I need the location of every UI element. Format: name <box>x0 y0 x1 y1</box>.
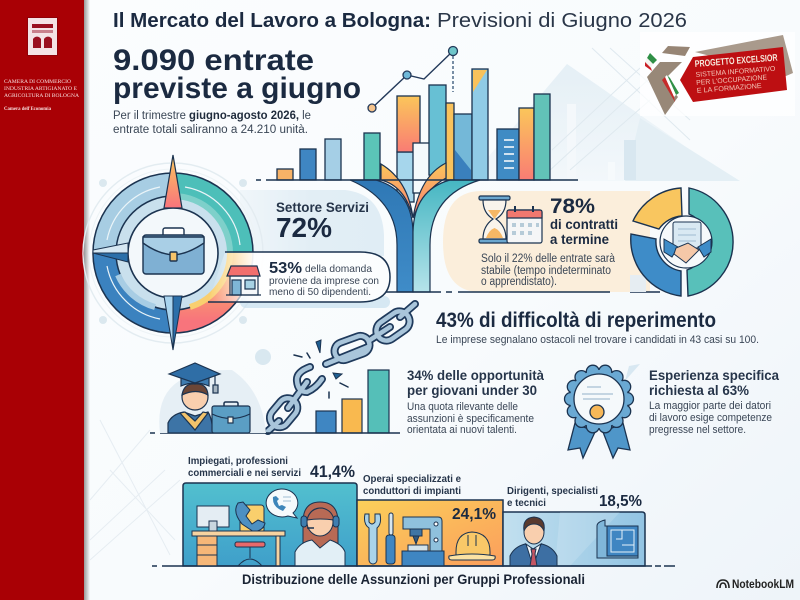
left panel: settore servizi background <box>240 190 384 256</box>
callout: 53% small businesses pill: proviene da imprese con <box>269 275 379 287</box>
text: 34% giovani under 30: Una quota rilevante delle <box>407 401 518 413</box>
chart: small rising bars <box>150 370 400 433</box>
label: operai: conduttori di impianti <box>363 485 461 497</box>
label: impiegati: commerciali e nei servizi <box>188 467 301 479</box>
callout: 53% small businesses pill: della domanda <box>305 263 372 275</box>
headline: 9.090 entrate previste a giugno <box>113 44 361 105</box>
icon: Camera di Commercio crest <box>27 17 58 56</box>
logo: Progetto Excelsior <box>640 32 795 116</box>
title <box>113 10 687 32</box>
panel: settore servizi heading: 72% <box>276 212 332 243</box>
sidebar organisation name: Camera dell'Economia <box>4 107 51 112</box>
icon: blueprint <box>597 520 638 558</box>
panel: contratti a termine text: di contratti <box>550 216 618 232</box>
icon: call centre agent <box>295 502 345 566</box>
label: impiegati: Impiegati, professioni <box>188 455 288 467</box>
text: esperienza specifica: La maggior parte dei datori <box>649 400 771 412</box>
sidebar organisation name: INDUSTRIA ARTIGIANATO E <box>4 86 78 92</box>
heading: 43% difficolta di reperimento <box>436 309 759 346</box>
label: dirigenti: Dirigenti, specialisti <box>507 485 598 497</box>
icon: shop <box>226 266 261 295</box>
intro text <box>113 110 311 136</box>
logo: Progetto Excelsior: SISTEMA INFORMATIVO <box>695 66 776 79</box>
panel: contratti a termine text: stabile (tempo indeterminato <box>481 265 611 277</box>
callout: 53% small businesses pill <box>208 252 390 308</box>
intro text: entrate totali saliranno a 24.210 unità. <box>113 124 308 136</box>
label: dirigenti: 18,5% <box>599 493 642 510</box>
title: Il Mercato del Lavoro a Bologna: <box>113 10 431 32</box>
faint background pyramid <box>90 48 740 560</box>
text: esperienza specifica: di lavoro esige competenze <box>649 412 772 424</box>
icon: briefcase <box>143 228 204 274</box>
text: 34% giovani under 30: orientata ai nuovi talenti. <box>407 424 517 436</box>
tree stem: flows branching from bars <box>350 163 480 292</box>
text: esperienza specifica: pregresse nel settore. <box>649 424 746 436</box>
label: dirigenti: e tecnici <box>507 497 546 509</box>
icon: desk with monitor and phone <box>192 502 285 566</box>
panel: operai 24,1% <box>357 500 503 566</box>
icon: rosette badge <box>564 364 640 458</box>
label: operai: Operai specializzati e <box>363 473 461 485</box>
icon: hourglass and calendar <box>479 196 542 243</box>
label: impiegati <box>188 455 355 481</box>
panel: operai 24,1%: 24,1% <box>452 506 496 523</box>
icon: milling machine <box>402 517 444 566</box>
sidebar organisation name: CAMERA DI COMMERCIO <box>4 79 71 85</box>
icon: wrench and screwdriver <box>364 513 395 564</box>
chart: contract donut with handshake <box>630 188 733 296</box>
text: 34% giovani under 30: 34% delle opportunità <box>407 368 544 383</box>
callout: 53% small businesses pill: 53% <box>269 260 302 277</box>
panel: contratti a termine text: o apprendistato). <box>481 276 557 288</box>
panel: contratti a termine text <box>481 195 618 288</box>
watermark: NotebookLM: NotebookLM <box>732 579 794 591</box>
panel: dirigenti 18,5% <box>503 512 645 566</box>
panel: settore servizi heading: Settore Servizi <box>276 199 369 215</box>
label: operai <box>363 473 461 497</box>
title: Previsioni di Giugno 2026 <box>437 10 687 32</box>
text: 34% giovani under 30 <box>407 368 544 436</box>
icon: manager <box>510 517 557 566</box>
sidebar organisation name <box>4 79 79 112</box>
panel: impiegati 41,4% <box>183 483 357 566</box>
intro text: Per il trimestre giugno-agosto 2026, le <box>113 110 311 122</box>
label: dirigenti <box>507 485 642 510</box>
heading: 43% difficolta di reperimento: 43% di difficoltà di reperimento <box>436 309 716 332</box>
icon: compass with briefcase <box>83 155 263 350</box>
panel: settore servizi heading <box>276 199 369 243</box>
panel: contratti a termine text: 78% <box>550 195 595 218</box>
logo: Progetto Excelsior: E LA FORMAZIONE <box>697 83 762 95</box>
text: 34% giovani under 30: assunzioni è specificamente <box>407 413 534 425</box>
text: esperienza specifica: Esperienza specifica <box>649 368 779 383</box>
right panel: contratti background <box>443 191 650 292</box>
caption: distribuzione assunzioni: Distribuzione delle Assunzioni per Gruppi Professionali <box>242 572 585 587</box>
logo: Progetto Excelsior: PER L'OCCUPAZIONE <box>696 74 768 87</box>
sidebar: Camera di Commercio <box>0 0 90 600</box>
sidebar organisation name: AGRICOLTURA DI BOLOGNA <box>4 93 79 99</box>
panel: contratti a termine text: Solo il 22% delle entrate sarà <box>481 253 616 265</box>
icon: graduate with briefcase <box>159 349 271 433</box>
chart: rising bars skyline <box>277 69 550 202</box>
icon: broken chain <box>266 304 415 431</box>
text: esperienza specifica <box>649 368 779 436</box>
icon: hard hat <box>449 532 495 560</box>
label: impiegati: 41,4% <box>310 462 355 481</box>
callout: 53% small businesses pill: meno di 50 dipendenti. <box>269 286 371 298</box>
icon: speech bubble with phone <box>266 489 298 518</box>
baselines <box>256 180 660 292</box>
text: esperienza specifica: richiesta al 63% <box>649 383 749 398</box>
chart: trend line with nodes <box>368 46 458 112</box>
bottom baseline <box>152 565 675 567</box>
text: 34% giovani under 30: per giovani under 30 <box>407 383 537 398</box>
headline: 9.090 entrate previste a giugno: 9.090 entrate <box>113 44 314 77</box>
headline: 9.090 entrate previste a giugno: previste a giugno <box>113 72 361 105</box>
heading: 43% difficolta di reperimento: Le imprese segnalano ostacoli nel trovare i candidati in 43 casi su 100. <box>436 334 759 346</box>
panel: contratti a termine text: a termine <box>550 231 609 247</box>
